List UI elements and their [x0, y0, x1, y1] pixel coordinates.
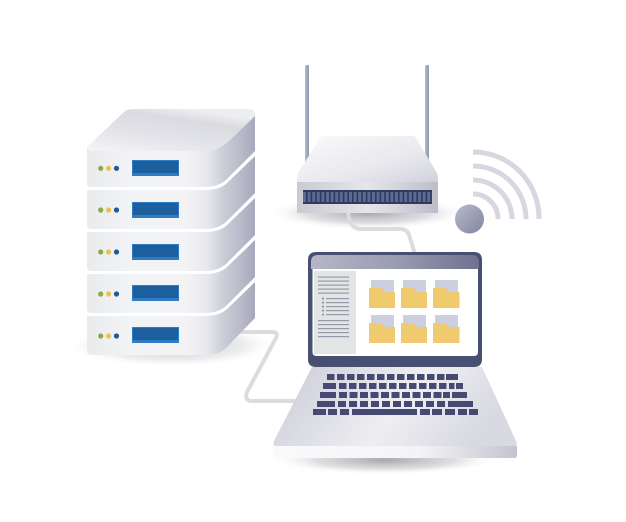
folder 5: [401, 315, 427, 343]
wifi ball: [455, 204, 484, 234]
folder 4: [369, 315, 395, 343]
laptop front lip: [273, 446, 517, 458]
sidebar: [314, 271, 356, 354]
wifi arcs: [473, 152, 539, 219]
server unit 4: [87, 240, 255, 313]
router: [297, 65, 438, 213]
router vent slot: [303, 190, 432, 204]
cable: router to laptop: [348, 212, 415, 254]
server rack: [87, 109, 255, 355]
server unit 5: [87, 282, 255, 355]
folder 6: [433, 315, 460, 343]
router top face: [297, 136, 438, 182]
wifi signal: [455, 152, 539, 234]
router shadow: [266, 196, 470, 230]
screen title bar: [311, 255, 479, 269]
router front face: [297, 182, 438, 213]
keyboard keys: [313, 374, 478, 415]
laptop shadow: [270, 445, 500, 475]
server shadow: [67, 323, 277, 367]
screen display: [312, 269, 478, 356]
folder 2: [401, 280, 427, 308]
folder 1: [369, 280, 395, 308]
server unit 3: [87, 198, 255, 271]
laptop keyboard deck: [273, 367, 517, 446]
antenna left: [305, 65, 309, 165]
server top face: [87, 109, 255, 151]
laptop: [270, 252, 517, 475]
antenna right: [425, 65, 429, 165]
server unit 1: [87, 113, 255, 187]
screen bezel: [308, 252, 482, 367]
cable: server to laptop: [226, 332, 300, 401]
folder 3: [433, 280, 460, 308]
server unit 2: [87, 156, 255, 229]
laptop screen: [308, 252, 482, 367]
